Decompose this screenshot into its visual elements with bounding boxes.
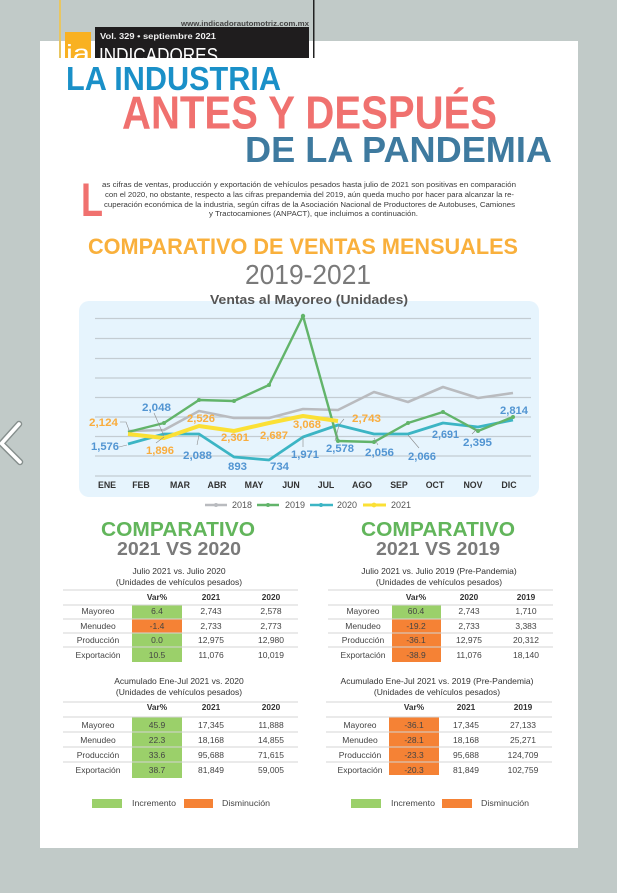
table: julio 2021 vs julio 2020: 2,733 — [200, 621, 222, 631]
table: julio 2021 vs julio 2020: 2,578 — [260, 606, 282, 616]
month axis: AGO — [352, 480, 372, 490]
table: acumulado 2021 vs 2019: 81,849 — [453, 765, 479, 775]
title: DE LA PANDEMIA — [245, 129, 552, 170]
table: acumulado 2021 vs 2020: 14,855 — [258, 735, 284, 745]
heading: 2021 vs 2019 — [361, 519, 515, 559]
leader lines — [119, 413, 477, 448]
legend: left tables — [92, 799, 270, 808]
table: acumulado 2021 vs 2019: Producción — [339, 750, 382, 760]
table: acumulado 2021 vs 2020: 95,688 — [198, 750, 224, 760]
table: julio 2021 vs julio 2019: -36.1 — [406, 635, 426, 645]
magazine header: www.indicadorautomotriz.com.mx — [180, 21, 309, 28]
table: acumulado 2021 vs 2019: 124,709 — [508, 750, 539, 760]
table: acumulado 2021 vs 2019: (Unidades de vehículos pesados) — [374, 687, 500, 697]
month axis: DIC — [501, 480, 517, 490]
month axis: MAR — [170, 480, 191, 490]
table: acumulado 2021 vs 2019: 102,759 — [508, 765, 539, 775]
table: julio 2021 vs julio 2020: 0.0 — [151, 635, 163, 645]
table: julio 2021 vs julio 2020 — [63, 566, 298, 662]
chart legend: 2020 — [337, 500, 357, 510]
table: julio 2021 vs julio 2019: Menudeo — [345, 621, 381, 631]
white page panel — [40, 41, 578, 848]
data labels: 1,896 — [146, 445, 174, 457]
chart legend: 2019 — [285, 500, 305, 510]
table: julio 2021 vs julio 2019: -38.9 — [406, 650, 426, 660]
table: acumulado 2021 vs 2020: Mayoreo — [81, 720, 115, 730]
legend: left tables: Disminución — [222, 799, 270, 808]
table: acumulado 2021 vs 2020: 11,888 — [258, 720, 284, 730]
table: julio 2021 vs julio 2019: 11,076 — [456, 650, 482, 660]
table: julio 2021 vs julio 2020: -1.4 — [150, 621, 165, 631]
table: acumulado 2021 vs 2019: 2021 — [457, 702, 476, 712]
table: julio 2021 vs julio 2019: Var% — [406, 592, 427, 602]
table: acumulado 2021 vs 2020: 33.6 — [149, 750, 166, 760]
title — [66, 60, 552, 170]
data labels: 2,395 — [463, 437, 493, 449]
table: julio 2021 vs julio 2020: 12,980 — [258, 635, 284, 645]
series 2018 — [128, 387, 513, 431]
month axis: ABR — [207, 480, 227, 490]
table: julio 2021 vs julio 2020: Producción — [77, 635, 120, 645]
heading: 2021 vs 2020 — [101, 519, 255, 559]
series 2020 — [128, 420, 513, 460]
magazine header: Vol. 329 • septiembre 2021 — [100, 31, 216, 41]
table: julio 2021 vs julio 2020: 12,975 — [198, 635, 224, 645]
table: acumulado 2021 vs 2019: 27,133 — [510, 720, 536, 730]
table: julio 2021 vs julio 2019: Exportación — [341, 650, 386, 660]
intro paragraph with drop cap: L — [81, 173, 103, 226]
data labels: 2,814 — [500, 405, 529, 417]
legend: left tables: Incremento — [132, 799, 177, 808]
data labels: 2,578 — [326, 443, 354, 455]
table: acumulado 2021 vs 2019: Menudeo — [342, 735, 378, 745]
data labels: 3,068 — [293, 419, 321, 431]
intro paragraph with drop cap: con el 2020, no obstante, respecto a las cifras prepandemia del 2019, aún queda mucho por hacer para alcanzar la re- — [105, 190, 514, 199]
table: acumulado 2021 vs 2019: -20.3 — [404, 765, 424, 775]
table: julio 2021 vs julio 2019: (Unidades de vehículos pesados) — [376, 577, 502, 587]
heading: monthly sales comparison: 2019-2021 — [245, 259, 371, 290]
month axis: MAY — [245, 480, 263, 490]
table: acumulado 2021 vs 2020 — [63, 676, 298, 778]
table: acumulado 2021 vs 2019 — [326, 676, 552, 775]
month axis: ENE — [98, 480, 116, 490]
table: acumulado 2021 vs 2019: Acumulado Ene-Jul 2021 vs. 2019 (Pre-Pandemia) — [340, 676, 534, 686]
table: julio 2021 vs julio 2019 — [328, 566, 553, 662]
table: acumulado 2021 vs 2019: 17,345 — [453, 720, 479, 730]
data labels: 893 — [228, 461, 247, 473]
table: julio 2021 vs julio 2019: 20,312 — [513, 635, 539, 645]
intro paragraph with drop cap: y Tractocamiones (ANPACT), que incluimos a continuación. — [209, 209, 418, 218]
month axis: JUN — [282, 480, 300, 490]
month axis: OCT — [426, 480, 445, 490]
table: julio 2021 vs julio 2019: Mayoreo — [346, 606, 380, 616]
data labels: 2,526 — [187, 413, 215, 425]
month axis — [98, 480, 517, 490]
table: julio 2021 vs julio 2020: 11,076 — [198, 650, 224, 660]
data labels: 2,088 — [183, 450, 212, 462]
table: acumulado 2021 vs 2020: 38.7 — [149, 765, 166, 775]
table: acumulado 2021 vs 2020: 2021 — [202, 702, 221, 712]
table: acumulado 2021 vs 2020: 17,345 — [198, 720, 224, 730]
table: acumulado 2021 vs 2019: -23.3 — [404, 750, 424, 760]
table: julio 2021 vs julio 2020: (Unidades de vehículos pesados) — [116, 577, 242, 587]
table: julio 2021 vs julio 2019: Producción — [342, 635, 385, 645]
table: julio 2021 vs julio 2019: -19.2 — [406, 621, 426, 631]
legend: right tables: Disminución — [481, 799, 529, 808]
data labels: 1,576 — [91, 441, 119, 453]
table: acumulado 2021 vs 2019: -36.1 — [404, 720, 424, 730]
table: julio 2021 vs julio 2019: 12,975 — [456, 635, 482, 645]
table: julio 2021 vs julio 2020: Mayoreo — [81, 606, 115, 616]
chart title: Ventas al Mayoreo (Unidades) — [210, 293, 408, 307]
table: julio 2021 vs julio 2019: Julio 2021 vs. Julio 2019 (Pre-Pandemia) — [361, 566, 517, 576]
title: LA INDUSTRIA — [66, 60, 281, 97]
table: acumulado 2021 vs 2020: Var% — [147, 702, 168, 712]
table: acumulado 2021 vs 2019: -28.1 — [404, 735, 424, 745]
table: acumulado 2021 vs 2019: 18,168 — [453, 735, 479, 745]
table: acumulado 2021 vs 2020: 71,615 — [258, 750, 284, 760]
legend: right tables: Incremento — [391, 799, 436, 808]
table: acumulado 2021 vs 2020: 22.3 — [149, 735, 166, 745]
title: ANTES Y DESPUÉS — [122, 86, 497, 138]
table: acumulado 2021 vs 2019: Exportación — [338, 765, 383, 775]
table: acumulado 2021 vs 2020: 18,168 — [198, 735, 224, 745]
table: julio 2021 vs julio 2020: 10.5 — [149, 650, 166, 660]
table: julio 2021 vs julio 2019: 2019 — [517, 592, 536, 602]
magazine header — [59, 0, 314, 68]
month axis: SEP — [390, 480, 408, 490]
data labels: 2,687 — [260, 430, 288, 442]
table: acumulado 2021 vs 2019: 2019 — [514, 702, 533, 712]
table: julio 2021 vs julio 2020: Julio 2021 vs. Julio 2020 — [132, 566, 226, 576]
table: julio 2021 vs julio 2020: 2,773 — [260, 621, 282, 631]
data labels: 2,743 — [352, 413, 381, 425]
table: julio 2021 vs julio 2019: 60.4 — [408, 606, 425, 616]
chart legend: 2018 — [232, 500, 252, 510]
data labels: 2,066 — [408, 451, 436, 463]
data labels: 2,124 — [89, 417, 119, 429]
month axis: JUL — [318, 480, 335, 490]
table: acumulado 2021 vs 2019: Var% — [404, 702, 425, 712]
table: acumulado 2021 vs 2020: Producción — [77, 750, 120, 760]
magazine header: ia — [66, 40, 90, 68]
data labels — [89, 402, 529, 473]
table: julio 2021 vs julio 2020: 2020 — [262, 592, 281, 602]
table: julio 2021 vs julio 2020: 10,019 — [258, 650, 284, 660]
table: julio 2021 vs julio 2019: 2,733 — [458, 621, 480, 631]
table: julio 2021 vs julio 2019: 1,710 — [515, 606, 537, 616]
table: acumulado 2021 vs 2020: Menudeo — [80, 735, 116, 745]
data labels: 1,971 — [291, 449, 320, 461]
chart legend: 2021 — [391, 500, 411, 510]
table: acumulado 2021 vs 2020: 2020 — [262, 702, 281, 712]
table: julio 2021 vs julio 2020: 2,743 — [200, 606, 222, 616]
table: julio 2021 vs julio 2020: Menudeo — [80, 621, 116, 631]
month axis: NOV — [463, 480, 483, 490]
heading: 2021 vs 2020: 2021 VS 2020 — [117, 538, 241, 559]
table: acumulado 2021 vs 2019: 25,271 — [510, 735, 536, 745]
intro paragraph with drop cap — [81, 173, 516, 226]
table: acumulado 2021 vs 2020: 45.9 — [149, 720, 166, 730]
heading: 2021 vs 2019: 2021 VS 2019 — [376, 538, 500, 559]
legend: right tables — [351, 799, 529, 808]
heading: monthly sales comparison — [88, 234, 518, 290]
data labels: 2,691 — [432, 429, 460, 441]
intro paragraph with drop cap: cuperación económica de la industria, según cifras de la Asociación Nacional de Productores de Autobuses, Camiones — [104, 200, 515, 209]
table: acumulado 2021 vs 2019: Mayoreo — [343, 720, 377, 730]
table: acumulado 2021 vs 2020: Acumulado Ene-Jul 2021 vs. 2020 — [114, 676, 244, 686]
heading: 2021 vs 2019: COMPARATIVO — [361, 519, 515, 541]
table: julio 2021 vs julio 2020: 6.4 — [151, 606, 163, 616]
month axis: FEB — [132, 480, 150, 490]
series 2021 — [128, 416, 338, 438]
table: julio 2021 vs julio 2019: 3,383 — [515, 621, 537, 631]
table: acumulado 2021 vs 2019: 95,688 — [453, 750, 479, 760]
table: acumulado 2021 vs 2020: 59,005 — [258, 765, 284, 775]
data labels: 2,056 — [365, 447, 394, 459]
data labels: 734 — [270, 461, 290, 473]
table: acumulado 2021 vs 2020: 81,849 — [198, 765, 224, 775]
table: acumulado 2021 vs 2020: (Unidades de vehículos pesados) — [116, 687, 242, 697]
line chart: wholesale sales — [79, 301, 539, 497]
intro paragraph with drop cap: as cifras de ventas, producción y exportación de vehículos pesados hasta julio de 2021 son positivas en comparación — [102, 180, 516, 189]
table: julio 2021 vs julio 2019: 2020 — [460, 592, 479, 602]
heading: 2021 vs 2020: COMPARATIVO — [101, 519, 255, 541]
heading: monthly sales comparison: COMPARATIVO DE VENTAS MENSUALES — [88, 234, 518, 259]
table: julio 2021 vs julio 2020: Var% — [147, 592, 168, 602]
series 2019 — [128, 314, 515, 444]
data labels: 2,301 — [221, 432, 250, 444]
table: julio 2021 vs julio 2019: 2,743 — [458, 606, 480, 616]
table: julio 2021 vs julio 2020: 2021 — [202, 592, 221, 602]
chart legend — [205, 500, 411, 510]
table: julio 2021 vs julio 2019: 18,140 — [513, 650, 539, 660]
table: julio 2021 vs julio 2020: Exportación — [76, 650, 121, 660]
data labels: 2,048 — [142, 402, 171, 414]
icon: back chevron — [2, 424, 20, 462]
table: acumulado 2021 vs 2020: Exportación — [76, 765, 121, 775]
